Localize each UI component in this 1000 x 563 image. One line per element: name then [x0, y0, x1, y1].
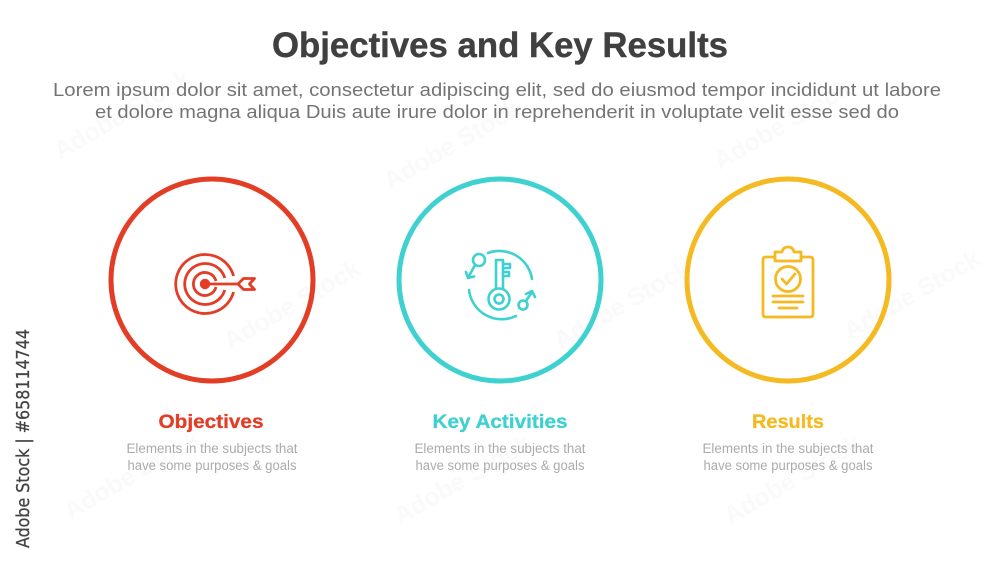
icon: target with arrow: [176, 254, 254, 314]
text: Adobe Stock: [219, 255, 365, 355]
results description: Elements in the subjects that: [702, 441, 874, 456]
intro paragraph: et dolore magna aliqua Duis aute irure dolor in reprehenderit in voluptate velit esse sed do: [95, 101, 899, 122]
objectives description: have some purposes & goals: [128, 458, 297, 473]
key activities description: [414, 441, 586, 473]
text: Adobe Stock: [549, 255, 695, 355]
panel: objectives: [111, 179, 313, 473]
key activities heading: Key Activities: [432, 411, 568, 433]
key activities description: Elements in the subjects that: [414, 441, 586, 456]
text: Adobe Stock: [719, 430, 865, 530]
key activities ring: [399, 179, 601, 381]
intro paragraph: [53, 79, 941, 122]
text: Adobe Stock: [839, 245, 985, 345]
text: Adobe Stock: [59, 425, 205, 525]
objectives ring: [111, 179, 313, 381]
objectives heading: Objectives: [158, 411, 264, 433]
text: Adobe Stock: [709, 75, 855, 175]
text: Adobe Stock: [49, 65, 195, 165]
results ring: [687, 179, 889, 381]
icon: clipboard with check: [763, 247, 813, 317]
text: Adobe Stock: [389, 430, 535, 530]
text: Adobe Stock: [379, 95, 525, 195]
results description: have some purposes & goals: [704, 458, 873, 473]
panel: key activities: [399, 179, 601, 473]
objectives description: [126, 441, 298, 473]
title: Objectives and Key Results: [272, 26, 728, 65]
panel: results: [687, 179, 889, 473]
icon: key with cycle arrows: [466, 251, 535, 319]
objectives description: Elements in the subjects that: [126, 441, 298, 456]
results description: [702, 441, 874, 473]
key activities description: have some purposes & goals: [416, 458, 585, 473]
stock credit: Adobe Stock | #658114744: [13, 329, 34, 548]
intro paragraph: Lorem ipsum dolor sit amet, consectetur adipiscing elit, sed do eiusmod tempor incididunt ut labore: [53, 79, 941, 100]
results heading: Results: [752, 411, 824, 433]
